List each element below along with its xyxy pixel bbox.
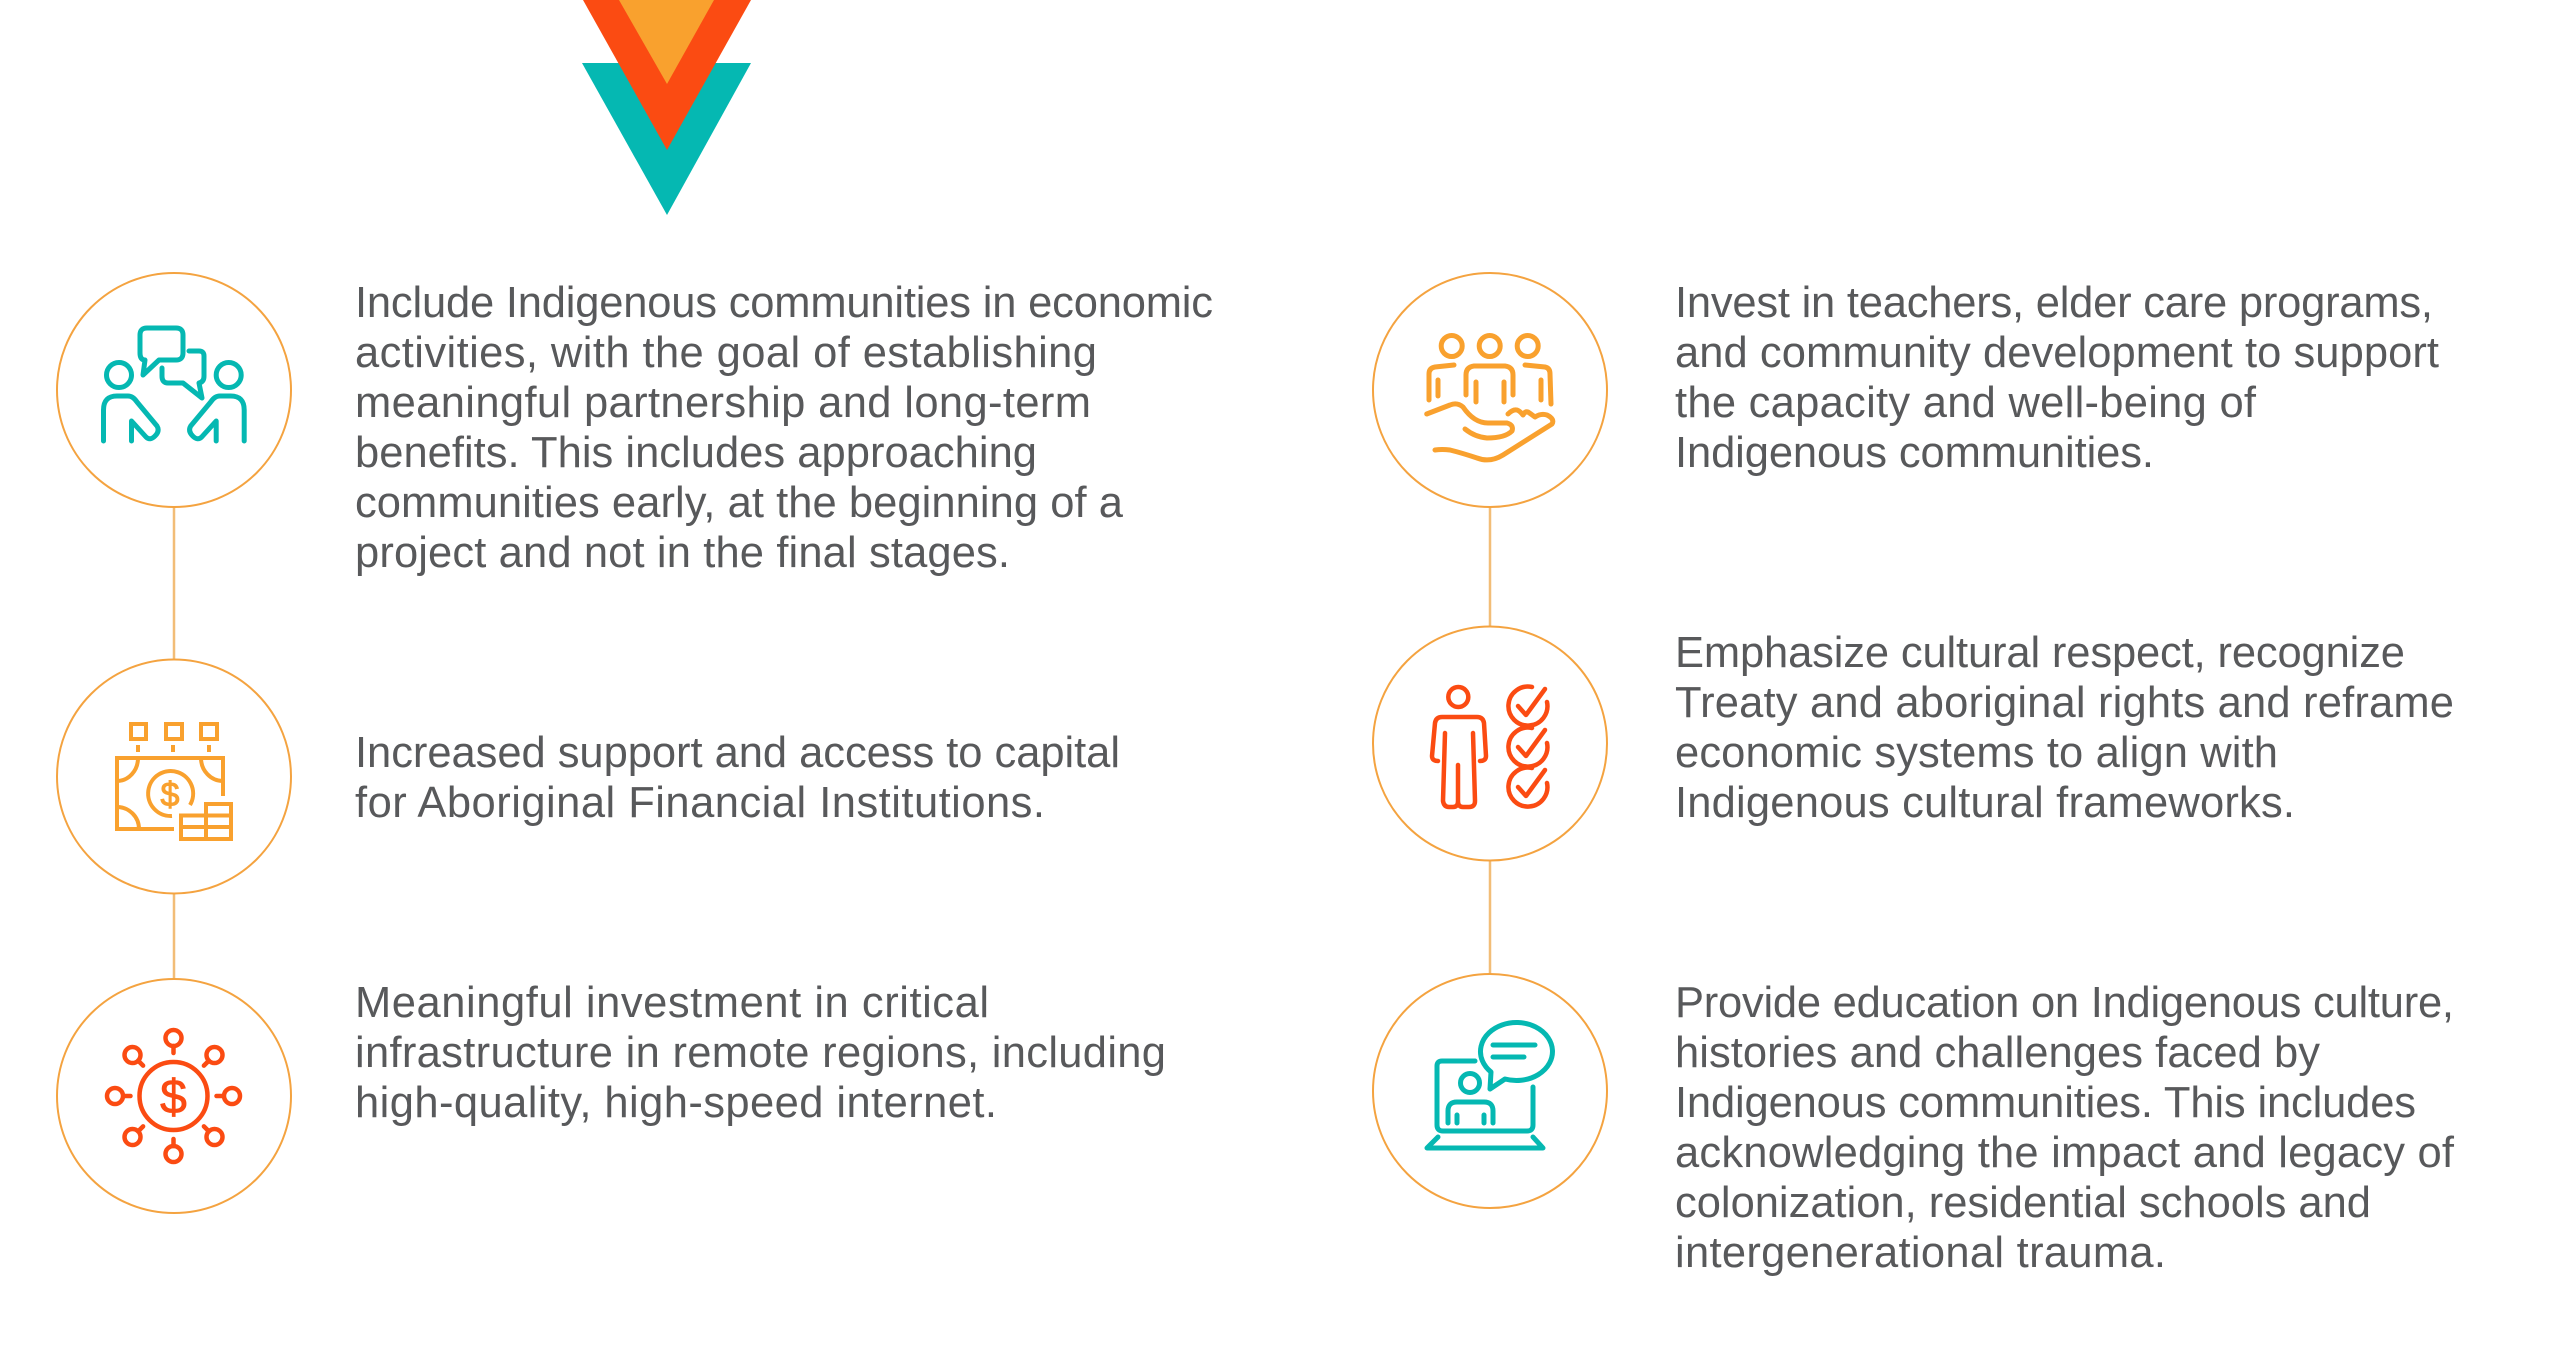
icon: person with checklist	[1373, 626, 1607, 860]
item: critical infrastructure	[57, 979, 1166, 1213]
text: education	[1675, 979, 2455, 1277]
text: community capacity: Invest in teachers, elder care programs,	[1675, 279, 2433, 327]
text: access to capital: for Aboriginal Financial Institutions.	[355, 779, 1045, 827]
icon: two people talking	[57, 273, 291, 507]
text: community capacity: the capacity and well-being of	[1675, 379, 2257, 427]
text: cultural respect: Emphasize cultural respect, recognize	[1675, 629, 2405, 677]
panel: left column	[57, 273, 1213, 1213]
text: community capacity: Indigenous communities.	[1675, 429, 2154, 477]
text: education: acknowledging the impact and legacy of	[1675, 1129, 2455, 1177]
text: critical infrastructure: high-quality, high-speed internet.	[355, 1079, 997, 1127]
item: economic partnership	[57, 273, 1213, 577]
text: economic partnership: benefits. This includes approaching	[355, 429, 1037, 477]
icon: banknote and coins: $	[161, 776, 180, 814]
connector: left circles one to two	[173, 507, 175, 659]
text: education: histories and challenges faced by	[1675, 1029, 2320, 1077]
connector: left circles two to three	[173, 894, 175, 979]
text: economic partnership	[355, 279, 1213, 577]
connector: right circles one to two	[1489, 508, 1491, 626]
text: education: colonization, residential schools and	[1675, 1179, 2371, 1227]
item: access to capital	[57, 660, 1120, 894]
text: economic partnership: project and not in the final stages.	[355, 529, 1010, 577]
text: critical infrastructure	[355, 979, 1166, 1127]
item: community capacity	[1373, 273, 2439, 507]
item: education	[1373, 974, 2455, 1277]
text: cultural respect: economic systems to align with	[1675, 729, 2278, 777]
text: cultural respect: Indigenous cultural frameworks.	[1675, 779, 2295, 827]
text: community capacity	[1675, 279, 2439, 477]
text: critical infrastructure: infrastructure in remote regions, including	[355, 1029, 1166, 1077]
item: cultural respect	[1373, 626, 2454, 860]
icon: banknote and coins	[57, 660, 291, 894]
icon: three people over a hand	[1373, 273, 1607, 507]
text: education: Indigenous communities. This includes	[1675, 1079, 2416, 1127]
text: education: Provide education on Indigenous culture,	[1675, 979, 2454, 1027]
text: economic partnership: communities early, at the beginning of a	[355, 479, 1124, 527]
text: cultural respect	[1675, 629, 2454, 827]
text: access to capital: Increased support and access to capital	[355, 729, 1120, 777]
icon: laptop with speaker and speech bubble	[1373, 974, 1607, 1208]
text: economic partnership: meaningful partnership and long-term	[355, 379, 1091, 427]
text: education: intergenerational trauma.	[1675, 1229, 2166, 1277]
decorative stacked triangles	[582, 0, 751, 215]
icon: dollar network: $	[160, 1071, 187, 1124]
text: cultural respect: Treaty and aboriginal rights and reframe	[1675, 679, 2454, 727]
text: access to capital	[355, 729, 1120, 827]
text: critical infrastructure: Meaningful investment in critical	[355, 979, 989, 1027]
connector: right circles two to three	[1489, 861, 1491, 974]
text: economic partnership: activities, with the goal of establishing	[355, 329, 1097, 377]
text: economic partnership: Include Indigenous communities in economic	[355, 279, 1213, 327]
panel: right column	[1373, 273, 2455, 1277]
text: community capacity: and community development to support	[1675, 329, 2439, 377]
icon: dollar network	[57, 979, 291, 1213]
